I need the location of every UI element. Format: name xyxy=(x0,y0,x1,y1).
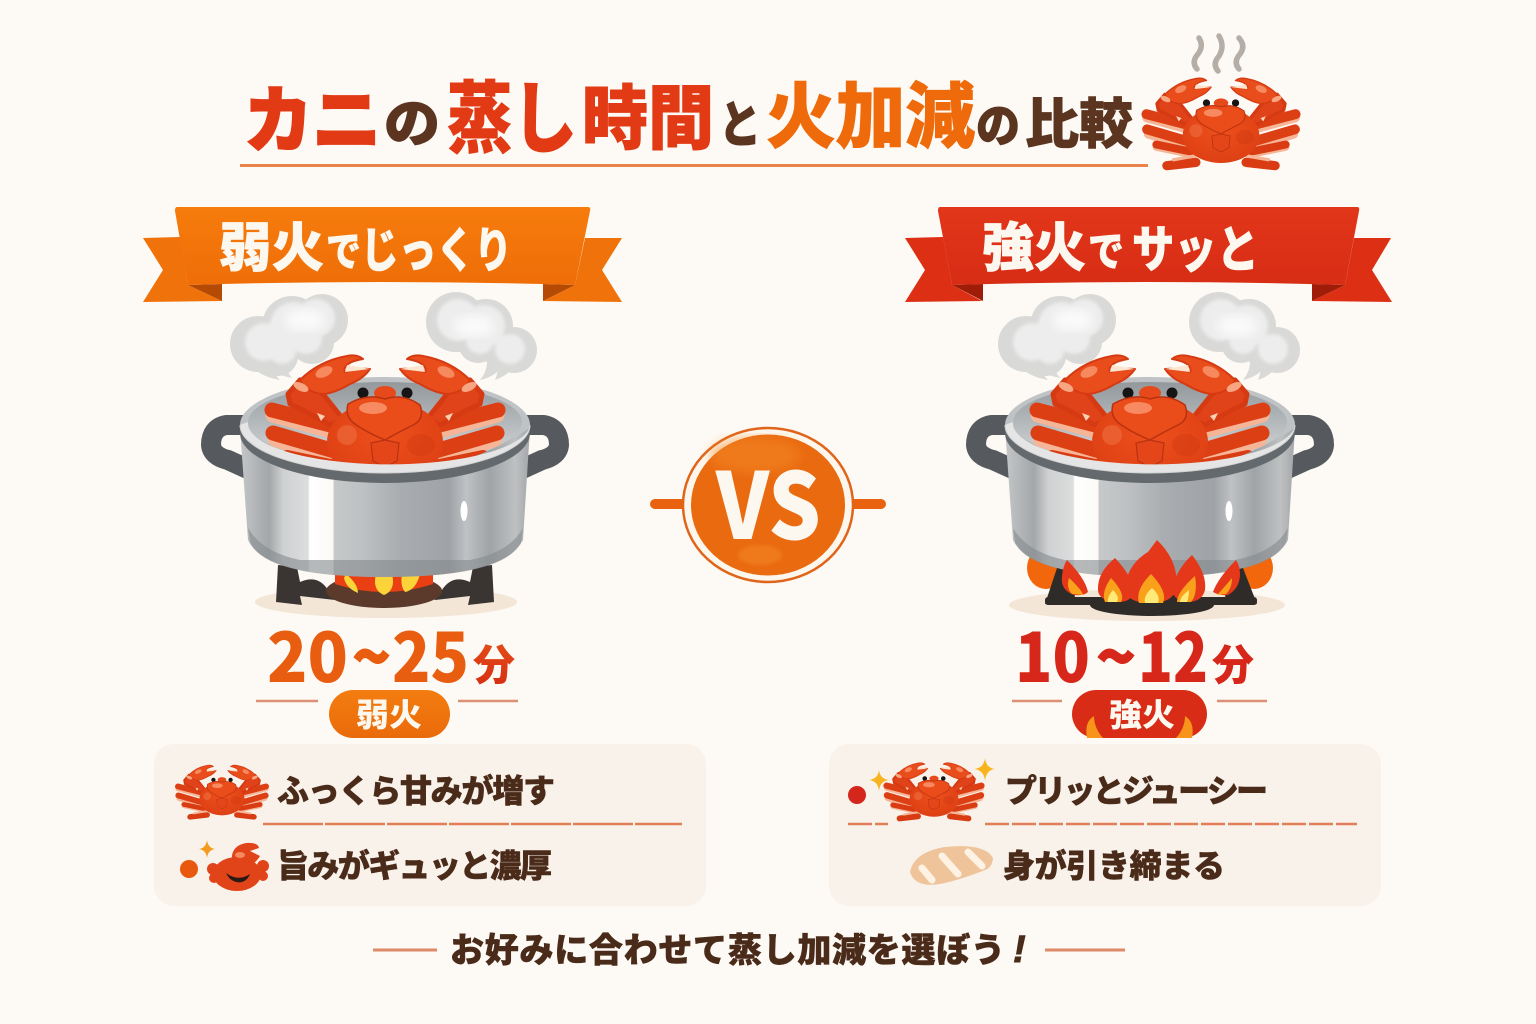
text: feature 1: プリッとジューシー xyxy=(1005,766,1268,812)
icon: crab meat xyxy=(910,846,993,885)
banner: high heat: 強火 xyxy=(982,206,1086,282)
icon: title steam xyxy=(1194,36,1243,71)
stove shadow xyxy=(255,586,517,618)
icon: crab xyxy=(887,763,981,818)
VS badge xyxy=(655,428,881,582)
pot front xyxy=(1005,422,1295,577)
time: high heat: 10 xyxy=(1015,603,1090,702)
title: の xyxy=(976,90,1020,156)
big flames xyxy=(1062,540,1240,603)
footer message: ! xyxy=(1013,929,1026,971)
panel: high heat features xyxy=(829,744,1381,906)
time: low heat: 25 xyxy=(392,603,469,702)
bullet dot xyxy=(848,786,866,804)
title underline xyxy=(240,164,1148,167)
banner: high heat xyxy=(905,206,1392,302)
text: feature 2: 身が引き締まる xyxy=(1003,841,1225,887)
label: high heat pill: 強火 xyxy=(1109,690,1175,736)
pot front xyxy=(240,422,530,577)
connector lines xyxy=(655,499,881,509)
text: feature 2: 旨みがギュッと濃厚 xyxy=(277,841,552,887)
banner: low heat: じっくり xyxy=(361,211,512,281)
VS badge: VS xyxy=(715,433,821,566)
icon: sparkle xyxy=(199,840,215,858)
footer message: お好みに合わせて蒸し加減を選ぼう xyxy=(450,923,1005,972)
time: high heat: 12 xyxy=(1138,603,1208,702)
time: low heat: ~ xyxy=(352,603,391,702)
time: high heat xyxy=(1015,603,1254,702)
banner: low heat xyxy=(143,206,622,302)
label: high heat pill xyxy=(1012,690,1267,738)
stove shadow xyxy=(1009,589,1285,621)
steam cloud right xyxy=(426,292,537,380)
title xyxy=(244,57,1133,169)
banner: low heat: 弱火 xyxy=(219,206,324,282)
title: 蒸し xyxy=(447,57,577,169)
title: 比較 xyxy=(1025,80,1133,159)
title: の xyxy=(384,82,440,157)
crab in pot xyxy=(1037,355,1263,488)
icon: sparkles xyxy=(869,758,995,791)
steam cloud right xyxy=(1189,292,1300,380)
illustration: low heat pot xyxy=(211,292,559,618)
time: high heat: ~ xyxy=(1096,603,1136,702)
title: と xyxy=(719,85,761,157)
steam cloud left xyxy=(998,294,1116,380)
illustration: high heat pot xyxy=(976,292,1324,621)
crab in pot xyxy=(272,355,498,488)
icon: title crab xyxy=(1146,78,1296,166)
time: low heat: 20 xyxy=(267,603,348,702)
icon: winking crab xyxy=(207,843,269,891)
label: low heat pill: 弱火 xyxy=(356,690,422,736)
stove and small flame xyxy=(276,565,494,608)
time: high heat: 分 xyxy=(1212,632,1254,693)
pot back xyxy=(211,377,559,478)
time: low heat xyxy=(267,603,515,702)
text: feature 1: ふっくら甘みが増す xyxy=(277,766,555,812)
icon: crab xyxy=(178,765,266,817)
banner: low heat: で xyxy=(326,218,361,278)
bullet dot xyxy=(180,860,198,878)
steam cloud left xyxy=(230,294,348,380)
title: カニ xyxy=(244,62,381,167)
label: low heat pill xyxy=(256,690,518,738)
pot back xyxy=(976,377,1324,478)
title: 時間 xyxy=(582,63,714,164)
panel: low heat features xyxy=(154,744,706,906)
banner: high heat: で xyxy=(1088,218,1124,278)
banner: high heat: サッと xyxy=(1132,210,1259,282)
stove xyxy=(1045,568,1257,616)
title: 火加減 xyxy=(766,58,975,163)
time: low heat: 分 xyxy=(473,632,515,693)
orange glow xyxy=(1027,547,1273,589)
